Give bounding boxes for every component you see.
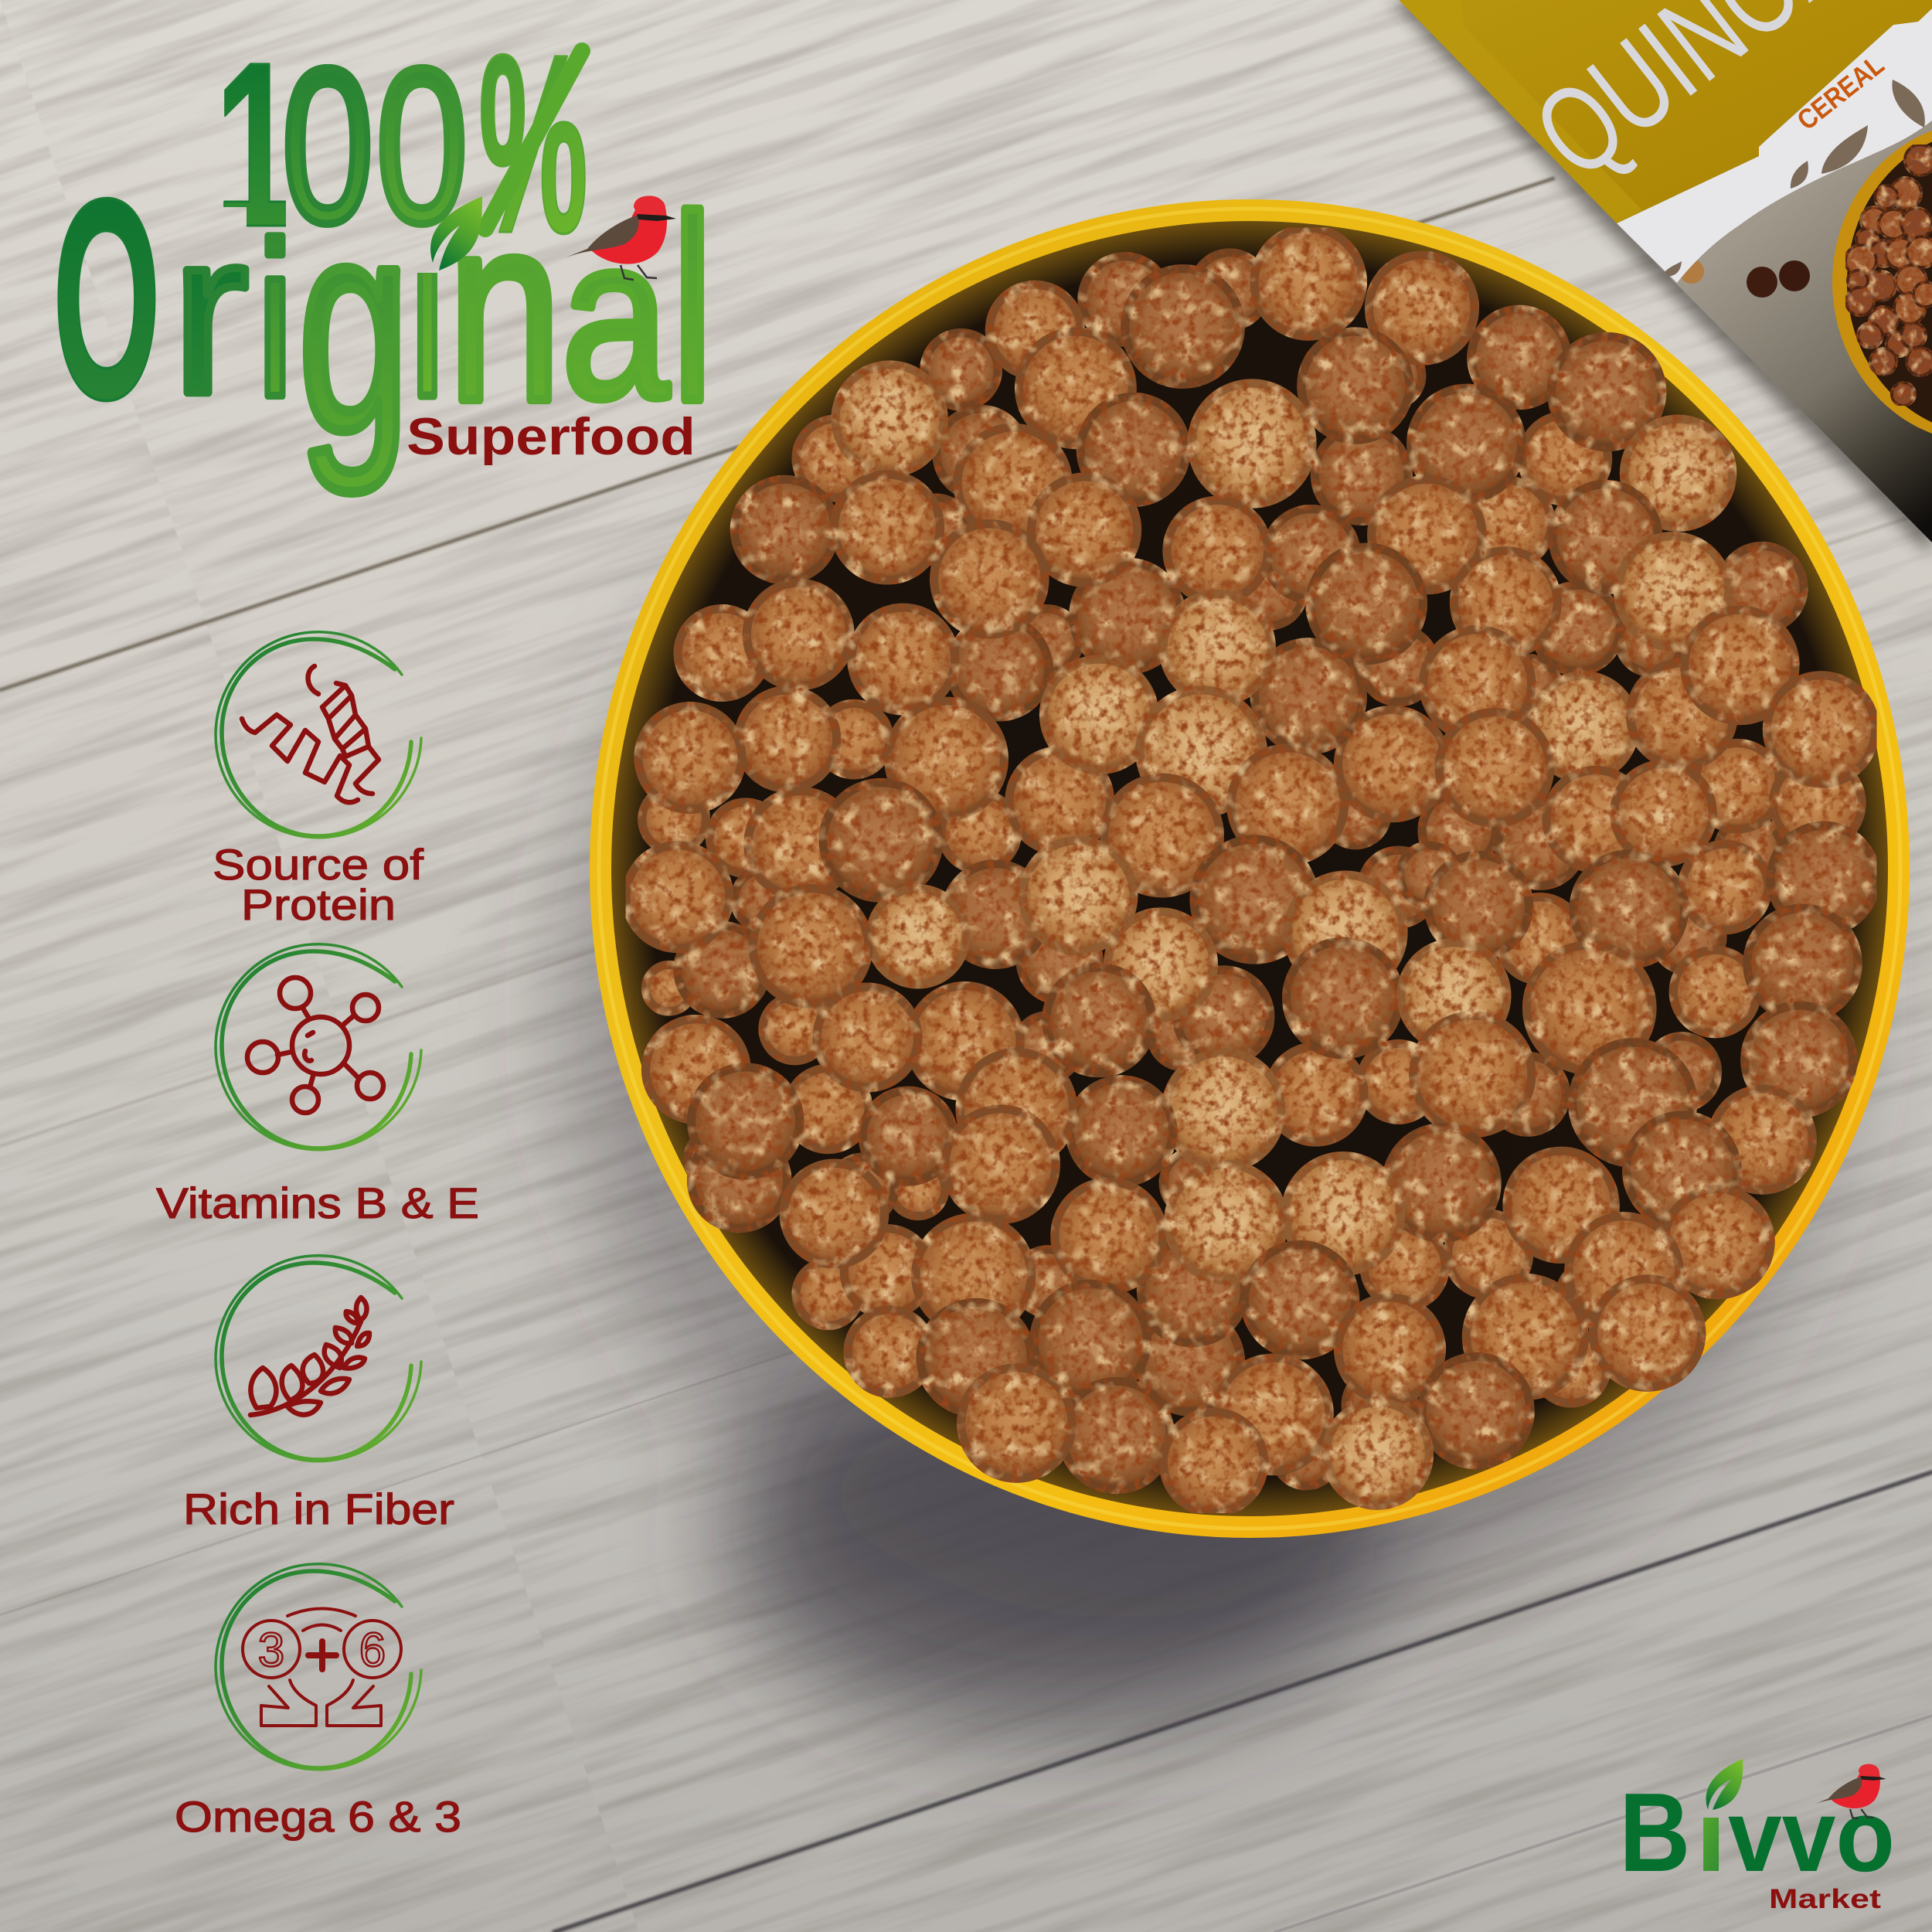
heading: 100%: 0 (281, 23, 374, 269)
heading: Original: r (172, 182, 249, 442)
icon: omega 3 + 6: 6 (359, 1624, 386, 1677)
icon ring (216, 632, 421, 838)
heading: 100%: % (478, 1, 588, 286)
subheading: Superfood: Superfood (406, 407, 696, 466)
wordmark: vvo (1728, 1779, 1895, 1893)
icon: leaf (430, 196, 482, 270)
brand logo: Bivvo Market (1619, 1759, 1895, 1914)
wordmark (1619, 1770, 1895, 1896)
heading: Original: l (672, 163, 713, 456)
icon: wheat (250, 1298, 369, 1415)
heading: 100% (215, 1, 588, 286)
label (213, 840, 423, 929)
package leaves (1665, 80, 1925, 277)
icon: red bird (562, 196, 676, 280)
product package (1399, 0, 1932, 543)
bowl shadow (564, 371, 1847, 1731)
label: Omega 6 & 3 (175, 1792, 461, 1841)
heading: 100%: 1 (215, 13, 297, 276)
mini bowl (1832, 121, 1932, 443)
benefit: Rich in Fiber (183, 1256, 454, 1533)
heading: Original (53, 140, 713, 495)
icon: omega 3 + 6: 3 (258, 1624, 284, 1677)
heading: 100%: 0 (376, 23, 468, 269)
benefit: Vitamins B & E (156, 944, 479, 1227)
label: Source of (213, 840, 423, 889)
icon: logo bird (1812, 1764, 1886, 1818)
mini bowl cereal (1845, 145, 1932, 406)
cereal balls (626, 228, 1876, 1513)
heading: Original: g (298, 158, 410, 495)
heading: Original: n (447, 162, 562, 456)
icon: protein helix (242, 666, 379, 802)
icon ring (216, 1564, 421, 1770)
spilled cereal on package (1679, 259, 1810, 298)
heading: Original: O (53, 140, 161, 459)
wordmark: B (1619, 1770, 1690, 1896)
benefit: Omega 6 & 3 (175, 1564, 461, 1841)
icon ring (216, 944, 421, 1150)
bowl (590, 199, 1910, 1538)
icon: omega 3 + 6 (243, 1609, 401, 1726)
heading: Original: a (561, 187, 670, 447)
package label panel (1617, 9, 1932, 283)
label: Vitamins B & E (156, 1179, 479, 1227)
icon: logo leaf (1706, 1759, 1743, 1810)
heading: Original: i (410, 179, 445, 447)
icon: molecule (247, 978, 383, 1113)
package shadow (1391, 0, 1932, 550)
title: 100% Original (53, 1, 713, 495)
package photo panel (1617, 116, 1932, 543)
icon ring (216, 1256, 421, 1461)
tagline: Market: Market (1769, 1884, 1881, 1914)
label: Rich in Fiber (183, 1485, 454, 1533)
package sub label: CEREAL (1791, 49, 1890, 136)
label: Protein (241, 880, 396, 929)
benefit: Source of Protein (213, 632, 423, 929)
bowl rim (590, 199, 1910, 1538)
wordmark: i (1696, 1770, 1726, 1895)
heading: Original: i (257, 197, 294, 442)
bowl interior (611, 221, 1888, 1516)
package gold panel (1399, 0, 1932, 223)
